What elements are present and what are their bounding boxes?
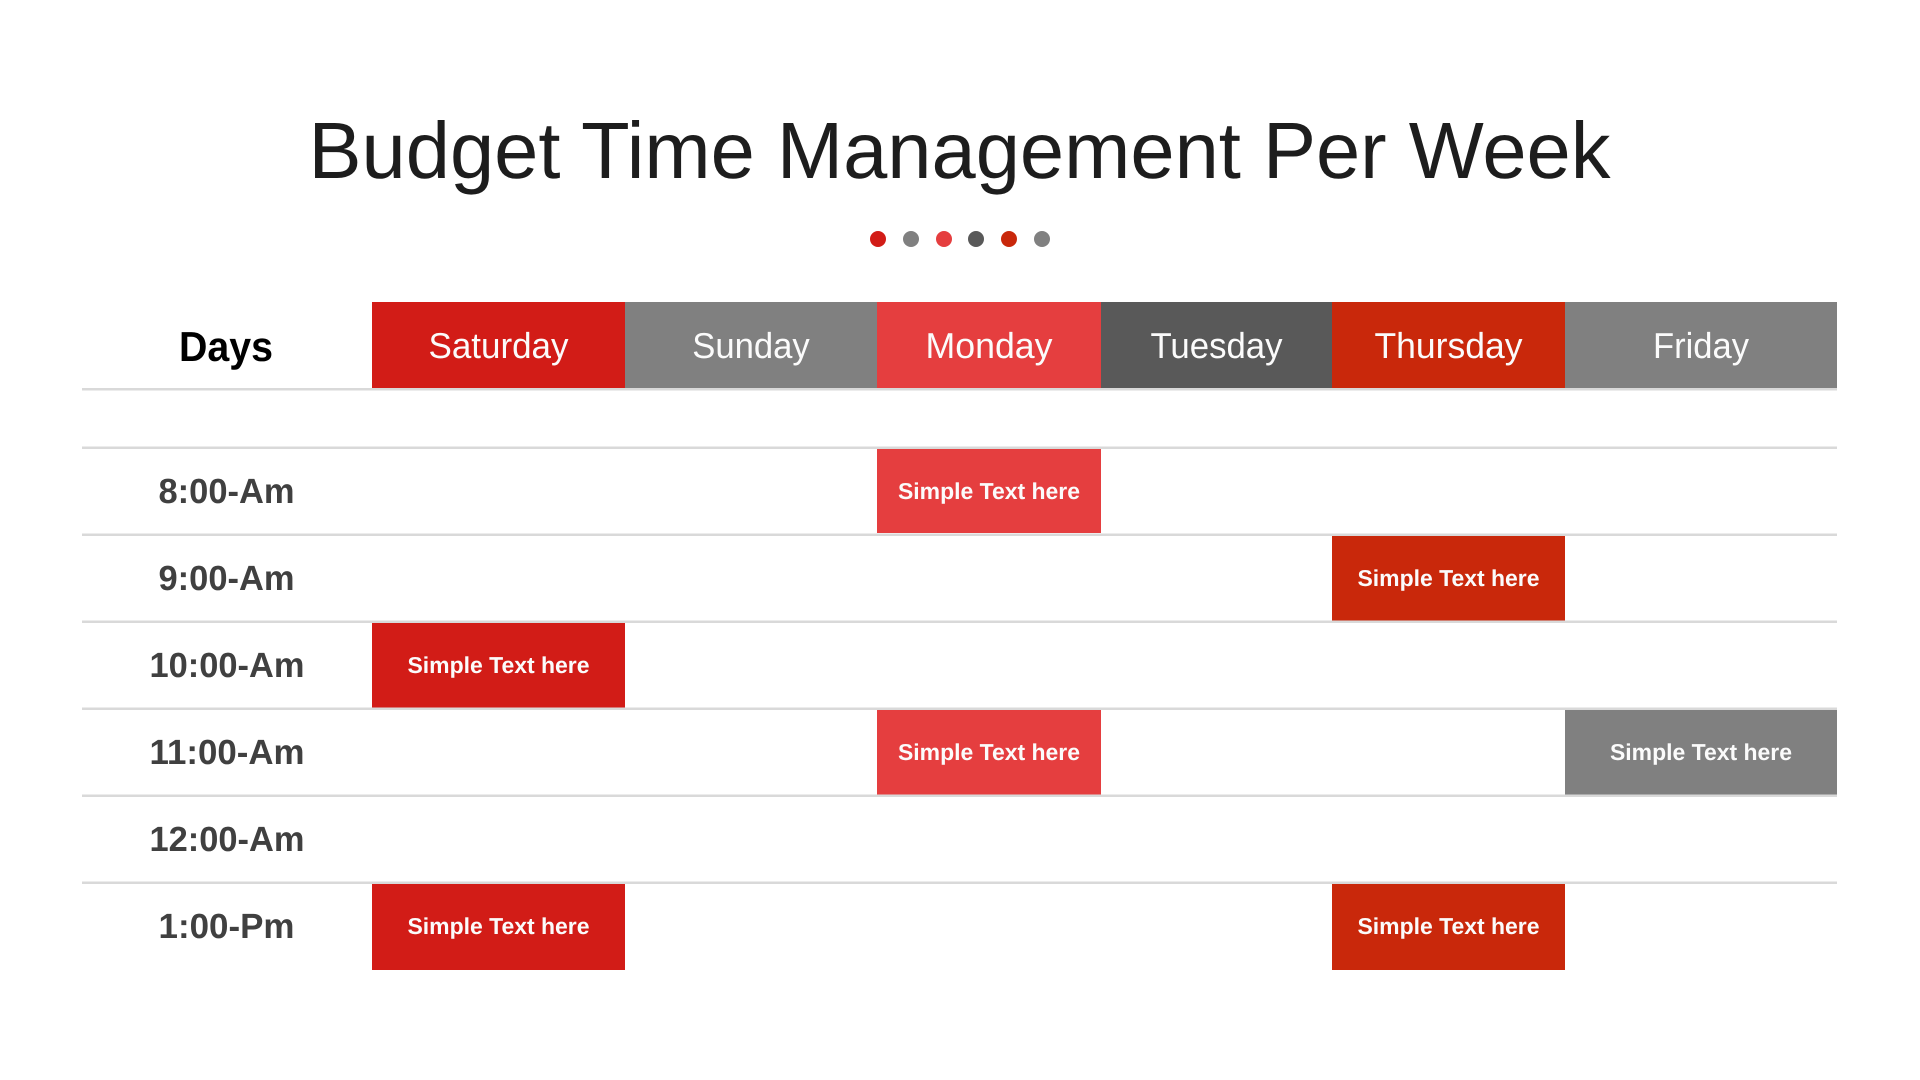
entry: Thursday 1:00: Simple Text here [1358,913,1540,939]
entry: Monday 11:00: Simple Text here [898,739,1080,765]
entry: Thursday 9:00 [1332,536,1565,620]
entry: Friday 11:00 [1565,710,1837,794]
entry: Monday 11:00 [877,710,1101,794]
entry: Saturday 1:00: Simple Text here [408,913,590,939]
header: Saturday: Saturday [428,325,568,366]
schedule entries [372,449,1837,970]
header: Friday [1565,302,1837,388]
header: Thursday [1332,302,1565,388]
entry: Monday 8:00 [877,449,1101,533]
time: 9:00-Am: 9:00-Am [158,559,294,598]
time: 1:00-Pm: 1:00-Pm [158,907,294,946]
decorative dot row [870,231,1050,247]
time: 8:00-Am: 8:00-Am [158,472,294,511]
header: Monday: Monday [926,325,1052,366]
schedule table header row [179,302,1837,388]
header: Saturday [372,302,625,388]
entry: Monday 8:00: Simple Text here [898,478,1080,504]
time: 11:00-Am: 11:00-Am [150,733,304,772]
entry: Thursday 1:00 [1332,884,1565,970]
entry: Thursday 9:00: Simple Text here [1358,565,1540,591]
header: Tuesday: Tuesday [1150,325,1282,366]
header: Sunday [625,302,877,388]
entry: Saturday 1:00 [372,884,625,970]
header: Monday [877,302,1101,388]
header label: Days: Days [179,323,273,370]
entry: Friday 11:00: Simple Text here [1610,739,1792,765]
header: Sunday: Sunday [692,325,810,366]
header: Thursday: Thursday [1374,325,1522,366]
time labels column [150,472,304,946]
time: 12:00-Am: 12:00-Am [150,820,304,859]
entry: Saturday 10:00: Simple Text here [408,652,590,678]
title: Budget Time Management Per Week [308,106,1611,195]
time: 10:00-Am: 10:00-Am [150,646,304,685]
entry: Saturday 10:00 [372,623,625,708]
header: Tuesday [1101,302,1332,388]
header: Friday: Friday [1653,325,1749,366]
